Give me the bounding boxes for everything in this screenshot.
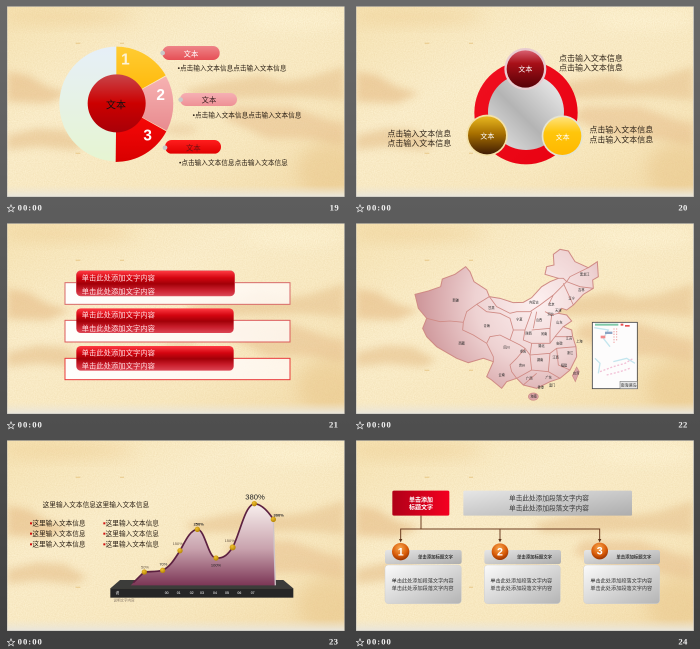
list item 2 xyxy=(65,308,290,342)
callout 2: 文本 xyxy=(202,96,217,105)
map of China: 内蒙古 xyxy=(529,300,539,305)
map of China: 吉林 xyxy=(578,287,585,292)
card 2: 单击添加标题文字 xyxy=(517,554,553,561)
area chart: 150% xyxy=(225,538,235,543)
footer 19: 19 xyxy=(330,202,339,212)
map of China: 安徽 xyxy=(556,340,563,345)
footer 24: 24 xyxy=(678,636,688,646)
map of China: 广西 xyxy=(526,376,532,381)
title box: 标题文字 xyxy=(409,503,433,511)
panel: slide 20 ring diagram xyxy=(350,6,700,212)
area chart: 300% xyxy=(274,512,284,517)
map of China: 西藏 xyxy=(459,340,466,345)
bullet list: 这里输入文本信息 xyxy=(106,540,159,549)
map of China: 辽宁 xyxy=(569,295,575,300)
map of China: 新疆 xyxy=(453,297,460,302)
map of China: 浙江 xyxy=(567,350,574,355)
card 1: 单击此处添加段落文字内容 xyxy=(392,584,454,592)
area chart: 50% xyxy=(141,564,149,569)
list item 1: 单击此处添加文字内容 xyxy=(82,274,156,283)
map of China: 江西 xyxy=(553,354,559,359)
map of China: 云南 xyxy=(499,372,505,377)
map of China: 香港 xyxy=(538,385,545,390)
list item 3: 单击此处添加文字内容 xyxy=(82,348,156,357)
map of China: 天津 xyxy=(555,308,562,313)
map of China: 重庆 xyxy=(520,349,527,354)
map of China: 江苏 xyxy=(566,336,572,341)
area chart: 250% xyxy=(194,522,204,527)
ring diagram xyxy=(466,48,583,164)
footer 20 xyxy=(356,202,688,212)
text block left: 点击输入文本信息 xyxy=(387,128,451,138)
ring diagram: 文本 xyxy=(480,132,494,141)
list item 3: 单击此处添加文字内容 xyxy=(82,362,156,371)
description box xyxy=(463,491,632,516)
footer 19: 00:00 xyxy=(18,202,43,212)
callout 3: 文本 xyxy=(186,143,201,152)
pie chart: 文本 xyxy=(106,99,126,112)
footer 23 xyxy=(7,636,339,646)
inset: South China Sea islands: 南海诸岛 xyxy=(621,381,637,387)
map of China: 河南 xyxy=(541,331,547,336)
area chart: 说 xyxy=(116,590,120,595)
area chart xyxy=(110,493,293,602)
card 3: 单击添加标题文字 xyxy=(616,554,652,561)
map of China: 宁夏 xyxy=(516,316,523,321)
panel: slide 19 pie chart xyxy=(1,6,357,212)
text block left: 点击输入文本信息 xyxy=(387,138,451,148)
pie chart: 1 xyxy=(121,52,130,69)
list item 3 xyxy=(65,346,290,380)
title box: 单击添加 xyxy=(409,496,433,504)
ring diagram: 文本 xyxy=(556,132,570,141)
footer 24 xyxy=(356,636,688,646)
text block right: 点击输入文本信息 xyxy=(589,125,653,135)
map of China: 广东 xyxy=(546,374,552,379)
map of China: 黑龙江 xyxy=(580,272,590,277)
card 3: 单击此处添加段落文字内容 xyxy=(590,576,652,584)
footer 24: 00:00 xyxy=(367,636,392,646)
map of China: 海南 xyxy=(531,394,537,399)
footer 23: 23 xyxy=(329,636,339,646)
footer 21 xyxy=(7,419,338,429)
callout 1 xyxy=(160,46,287,72)
footer 22: 22 xyxy=(678,419,688,429)
card 1 xyxy=(385,543,462,604)
bullet list: 这里输入文本信息 xyxy=(106,519,159,528)
connector arrows xyxy=(399,516,601,542)
map of China: 甘肃 xyxy=(488,305,494,310)
bullet list: 这里输入文本信息 xyxy=(32,519,86,528)
area chart: 00 xyxy=(165,591,169,595)
chart heading: 这里输入文本信息这里输入文本信息 xyxy=(43,500,150,509)
card 2: 单击此处添加段落文字内容 xyxy=(490,584,552,592)
footer 20: 20 xyxy=(678,202,688,212)
pie chart: 2 xyxy=(156,87,165,104)
card 3: 3 xyxy=(597,546,603,558)
pie chart xyxy=(59,47,173,162)
bullet list: 这里输入文本信息 xyxy=(106,529,159,538)
card 3: 单击此处添加段落文字内容 xyxy=(590,584,652,592)
text block top right: 点击输入文本信息 xyxy=(559,53,623,63)
map of China: 上海 xyxy=(576,339,583,344)
bullet list xyxy=(30,519,159,549)
area chart: 03 xyxy=(200,591,204,595)
callout 3: •点击输入文本信息点击输入文本信息 xyxy=(179,158,288,167)
map of China: 贵州 xyxy=(519,362,525,367)
callout 2 xyxy=(178,93,302,120)
map of China: 河北 xyxy=(548,312,555,317)
bullet list: 这里输入文本信息 xyxy=(32,540,86,549)
map of China: 湖北 xyxy=(538,343,545,348)
footer 23: 00:00 xyxy=(18,636,43,646)
footer 22 xyxy=(356,419,688,429)
map of China: 山东 xyxy=(556,319,562,324)
ring diagram: 文本 xyxy=(518,65,532,74)
map of China: 台湾 xyxy=(573,371,580,376)
text block top right xyxy=(559,53,623,73)
map of China: 福建 xyxy=(561,362,568,367)
map of China xyxy=(415,249,598,400)
map of China: 青海 xyxy=(484,323,491,328)
footer 22: 00:00 xyxy=(367,419,392,429)
text block right xyxy=(589,125,653,144)
area chart: 05 xyxy=(225,591,229,595)
card 1: 单击添加标题文字 xyxy=(418,554,454,561)
map of China: 澳门 xyxy=(549,382,555,387)
callout 1: 文本 xyxy=(184,50,199,59)
panel: slide 24 org chart xyxy=(350,440,700,646)
area chart: 02 xyxy=(190,591,194,595)
card 2: 2 xyxy=(497,546,503,558)
card 1: 单击此处添加段落文字内容 xyxy=(392,576,454,584)
panel: slide 21 stacked bars xyxy=(1,223,357,429)
inset: South China Sea islands xyxy=(592,322,637,389)
area chart: 150% xyxy=(173,541,183,546)
text block left xyxy=(387,128,451,148)
footer 20: 00:00 xyxy=(367,202,392,212)
list item 2: 单击此处添加文字内容 xyxy=(82,311,156,320)
description box: 单击此处添加段落文字内容 xyxy=(509,503,589,512)
area chart: 380% xyxy=(245,493,265,502)
footer 21: 00:00 xyxy=(18,419,43,429)
card 2: 单击此处添加段落文字内容 xyxy=(490,576,552,584)
footer 21: 21 xyxy=(329,419,338,429)
callout 3 xyxy=(163,140,288,167)
footer 19 xyxy=(7,202,339,212)
text block top right: 点击输入文本信息 xyxy=(559,63,623,73)
list item 1 xyxy=(65,271,290,304)
panel: slide 22 China map xyxy=(350,223,700,429)
card 2 xyxy=(484,543,561,604)
description box: 单击此处添加段落文字内容 xyxy=(509,494,589,503)
map of China: 四川 xyxy=(504,346,510,350)
title box xyxy=(392,491,449,516)
area chart: 07 xyxy=(251,591,255,595)
card 3 xyxy=(584,543,660,604)
bullet list: 这里输入文本信息 xyxy=(32,529,86,538)
area chart: 100% xyxy=(211,563,222,568)
list item 2: 单击此处添加文字内容 xyxy=(82,324,156,333)
callout 1: •点击输入文本信息点击输入文本信息 xyxy=(178,63,287,72)
map of China: 陕西 xyxy=(526,330,532,335)
map of China: 北京 xyxy=(548,302,554,307)
area chart: 04 xyxy=(213,591,217,595)
list item 1: 单击此处添加文字内容 xyxy=(82,287,156,296)
text block right: 点击输入文本信息 xyxy=(589,134,653,144)
pie chart: 3 xyxy=(143,127,152,144)
area chart: 06 xyxy=(237,591,241,595)
area chart: 70% xyxy=(159,561,168,566)
panel: slide 23 area chart xyxy=(1,440,357,646)
callout 2: •点击输入文本信息点击输入文本信息 xyxy=(193,111,302,120)
area chart: 说明文字内容 xyxy=(114,597,135,602)
map of China: 湖南 xyxy=(537,357,543,362)
map of China: 山西 xyxy=(536,317,542,322)
card 1: 1 xyxy=(398,546,404,558)
area chart: 01 xyxy=(177,591,181,595)
